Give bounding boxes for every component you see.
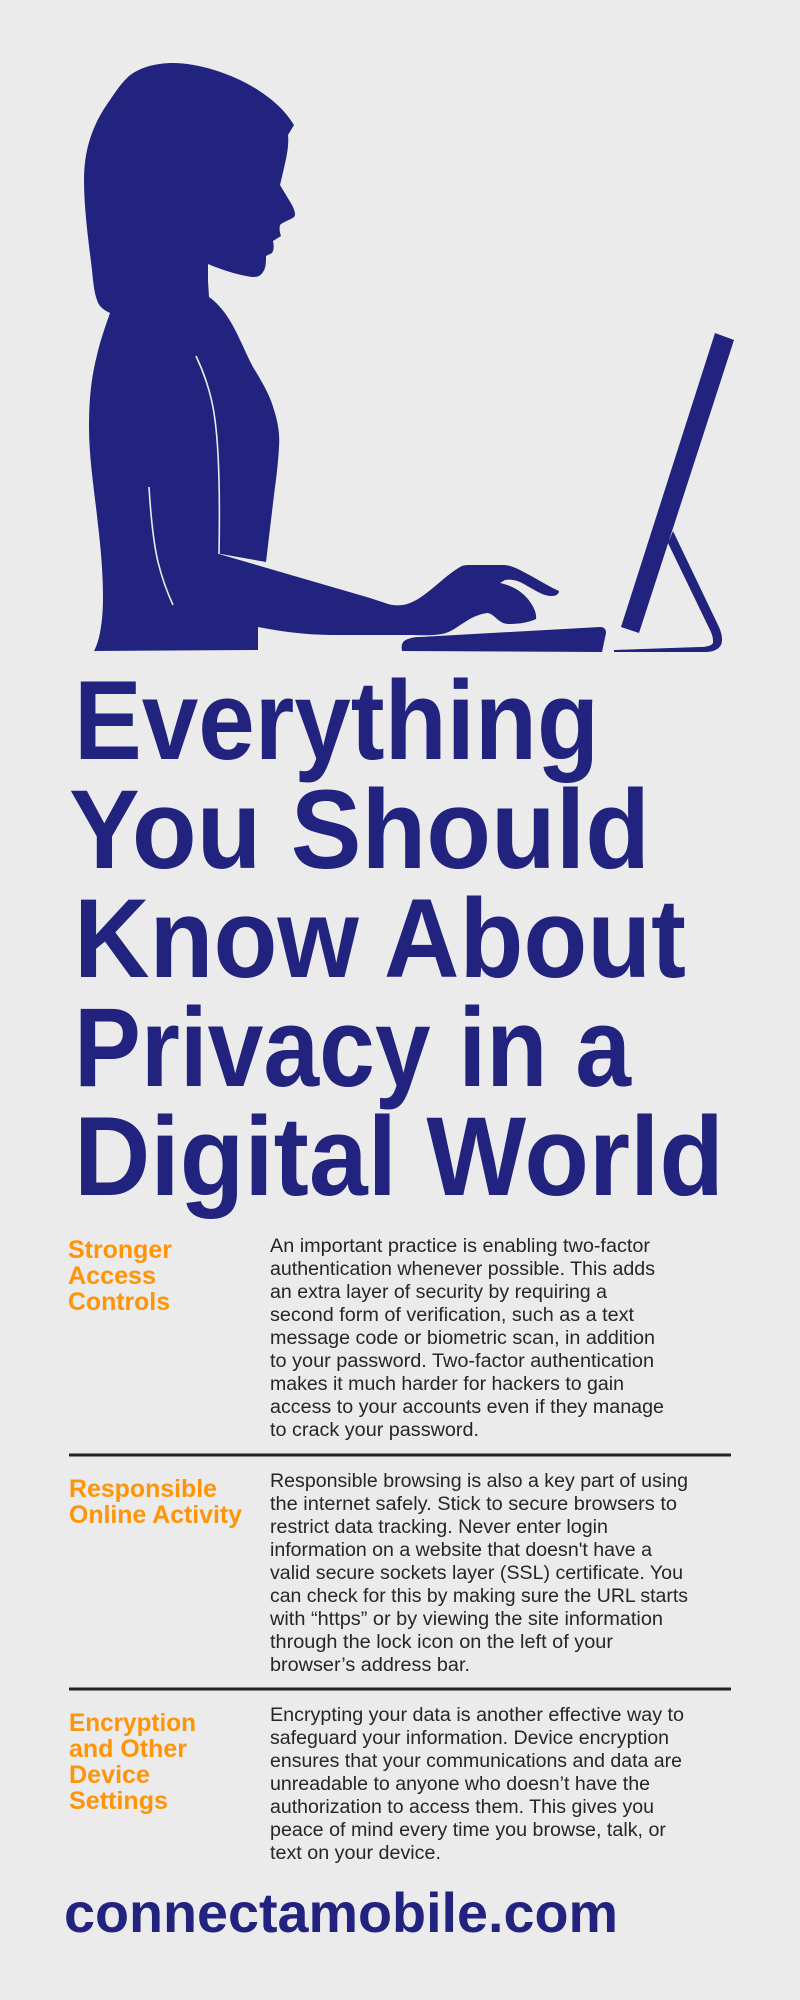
icon: keyboard: [402, 627, 606, 652]
heading: encryption and other device settings: Device: [69, 1761, 150, 1789]
text block: two-factor authentication: an extra layer of security by requiring a: [270, 1282, 607, 1303]
text block: responsible browsing: browser’s address bar.: [270, 1655, 470, 1676]
icon: computer monitor: [621, 333, 734, 633]
title: You Should: [69, 767, 650, 892]
text block: responsible browsing: can check for this by making sure the URL starts: [270, 1586, 688, 1607]
heading: responsible online activity: Responsible: [69, 1475, 217, 1503]
text block: two-factor authentication: to your password. Two-factor authentication: [270, 1351, 654, 1372]
text block: two-factor authentication: second form of verification, such as a text: [270, 1305, 635, 1326]
text block: responsible browsing: with “https” or by viewing the site information: [269, 1609, 663, 1630]
text block: encrypting your data: authorization to access them. This gives you: [270, 1797, 654, 1818]
heading: encryption and other device settings: and Other: [69, 1735, 187, 1763]
text block: encrypting your data: [270, 1705, 684, 1864]
heading: encryption and other device settings: Encryption: [69, 1709, 196, 1737]
text block: responsible browsing: the internet safely. Stick to secure browsers to: [270, 1494, 677, 1515]
heading: encryption and other device settings: [69, 1709, 196, 1815]
website url: connectamobile.com: [64, 1881, 618, 1944]
heading: responsible online activity: [69, 1475, 242, 1529]
text block: two-factor authentication: to crack your password.: [270, 1420, 479, 1441]
text block: responsible browsing: through the lock icon on the left of your: [270, 1632, 614, 1653]
text block: encrypting your data: safeguard your information. Device encryption: [270, 1728, 669, 1749]
text block: responsible browsing: [269, 1471, 688, 1676]
text block: encrypting your data: ensures that your communications and data are: [270, 1751, 682, 1772]
panel: stronger access controls: [68, 1236, 664, 1441]
text block: responsible browsing: Responsible browsing is also a key part of using: [270, 1471, 688, 1492]
text block: two-factor authentication: message code or biometric scan, in addition: [270, 1328, 655, 1349]
title: Everything: [74, 658, 599, 783]
text block: responsible browsing: valid secure sockets layer (SSL) certificate. You: [270, 1563, 683, 1584]
text block: two-factor authentication: makes it much harder for hackers to gain: [270, 1374, 624, 1395]
text block: encrypting your data: text on your device.: [270, 1843, 441, 1864]
text block: two-factor authentication: [270, 1236, 664, 1441]
panel: encryption and other device settings: [69, 1705, 684, 1864]
illustration: woman typing at a computer: [84, 63, 734, 652]
text block: two-factor authentication: authentication whenever possible. This adds: [270, 1259, 655, 1280]
text block: encrypting your data: unreadable to anyone who doesn’t have the: [270, 1774, 650, 1795]
heading: stronger access controls: Access: [68, 1262, 156, 1290]
title: Digital World: [74, 1094, 724, 1219]
text block: two-factor authentication: access to your accounts even if they manage: [270, 1397, 664, 1418]
icon: woman silhouette: [84, 63, 559, 651]
text block: encrypting your data: Encrypting your data is another effective way to: [270, 1705, 684, 1726]
text block: responsible browsing: information on a website that doesn't have a: [270, 1540, 652, 1561]
text block: encrypting your data: peace of mind every time you browse, talk, or: [270, 1820, 667, 1841]
heading: responsible online activity: Online Activity: [69, 1501, 242, 1529]
title: Know About: [74, 876, 686, 1001]
text block: responsible browsing: restrict data tracking. Never enter login: [270, 1517, 608, 1538]
panel: responsible online activity: [69, 1471, 688, 1676]
title: [69, 658, 724, 1219]
heading: encryption and other device settings: Settings: [69, 1787, 168, 1815]
title: Privacy in a: [74, 985, 632, 1110]
text block: two-factor authentication: An important practice is enabling two-factor: [270, 1236, 651, 1257]
heading: stronger access controls: Controls: [68, 1288, 170, 1316]
icon: monitor stand: [614, 531, 722, 652]
heading: stronger access controls: Stronger: [68, 1236, 172, 1264]
heading: stronger access controls: [68, 1236, 172, 1316]
